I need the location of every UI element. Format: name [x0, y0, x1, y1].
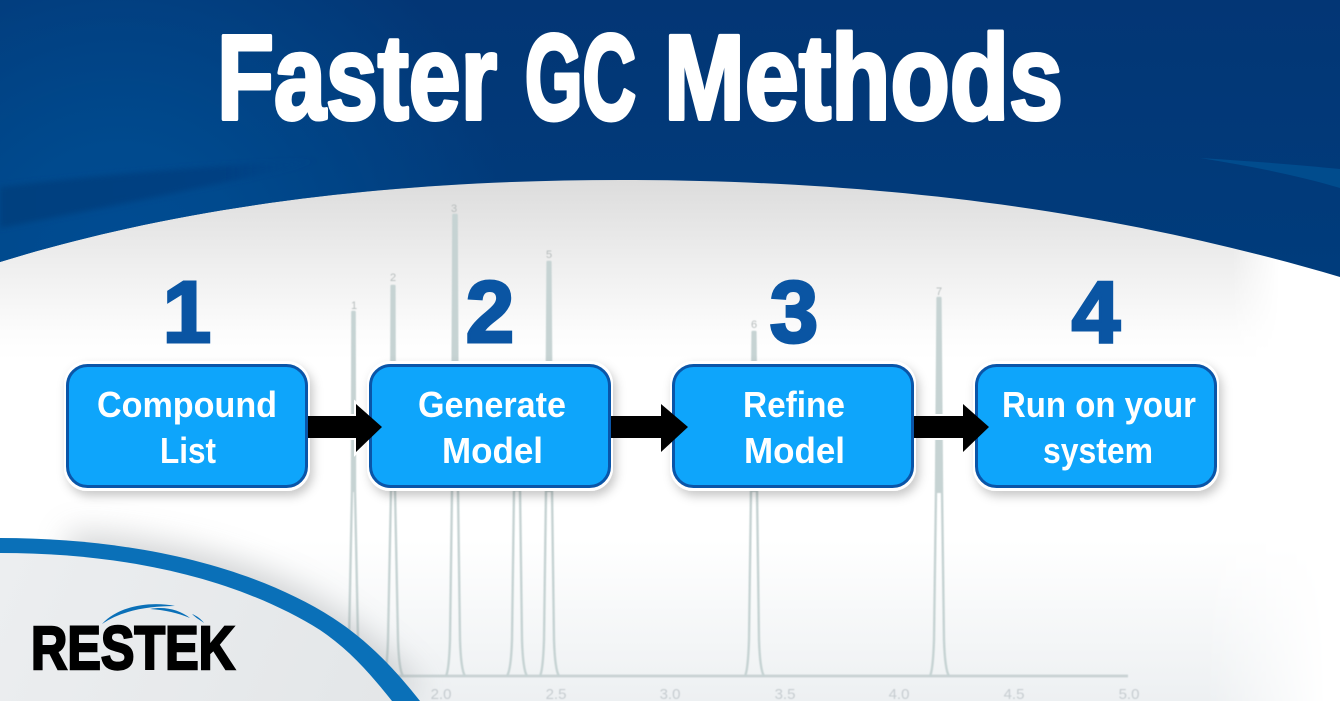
number 2: 2 [466, 264, 514, 361]
box: Run on your system [973, 361, 1219, 491]
axis labels [431, 686, 1139, 701]
box: Refine Model: Refine [743, 384, 845, 425]
peak labels: 5 [546, 249, 552, 261]
decorative arrow outlines [300, 404, 988, 452]
step 3 [670, 264, 916, 491]
number 1: 1 [163, 264, 211, 361]
peak labels: 7 [936, 286, 942, 298]
arrow: step 1 to 2 [308, 404, 382, 452]
title [217, 9, 1063, 145]
box: Refine Model: Model [744, 430, 845, 471]
peak labels [351, 203, 942, 331]
arrow: step 3 to 4 [914, 404, 989, 452]
chromatogram [345, 203, 1139, 701]
box: Compound List [64, 361, 310, 491]
step 1 [64, 264, 310, 491]
peak labels: 6 [751, 319, 757, 331]
Restek logo: RESTEK [31, 614, 235, 682]
header banner [0, 0, 1340, 277]
arrow: step 2 to 3 [611, 404, 688, 452]
left swoosh [0, 160, 322, 228]
peak labels: 2 [390, 272, 396, 284]
box: Run on your system: Run on your [1002, 384, 1196, 425]
peak labels: 1 [351, 300, 357, 312]
box: Generate Model [367, 361, 613, 491]
step 4 [973, 264, 1219, 491]
box: Generate Model: Model [442, 430, 543, 471]
corner logo panel [0, 532, 428, 701]
box: Run on your system: system [1043, 430, 1153, 471]
peak labels: 3 [451, 203, 457, 215]
number 4: 4 [1072, 264, 1120, 361]
title: Methods [664, 9, 1063, 145]
number 3: 3 [770, 264, 818, 361]
box: Compound List: Compound [97, 384, 277, 425]
bottom grey shading [353, 612, 1270, 701]
step 2 [367, 264, 613, 491]
title: GC [525, 9, 636, 145]
title: Faster [217, 9, 497, 145]
right swoosh [1200, 158, 1340, 188]
top grey shading [0, 180, 1258, 306]
box: Compound List: List [160, 430, 216, 471]
box: Generate Model: Generate [418, 384, 566, 425]
box: Refine Model [670, 361, 916, 491]
